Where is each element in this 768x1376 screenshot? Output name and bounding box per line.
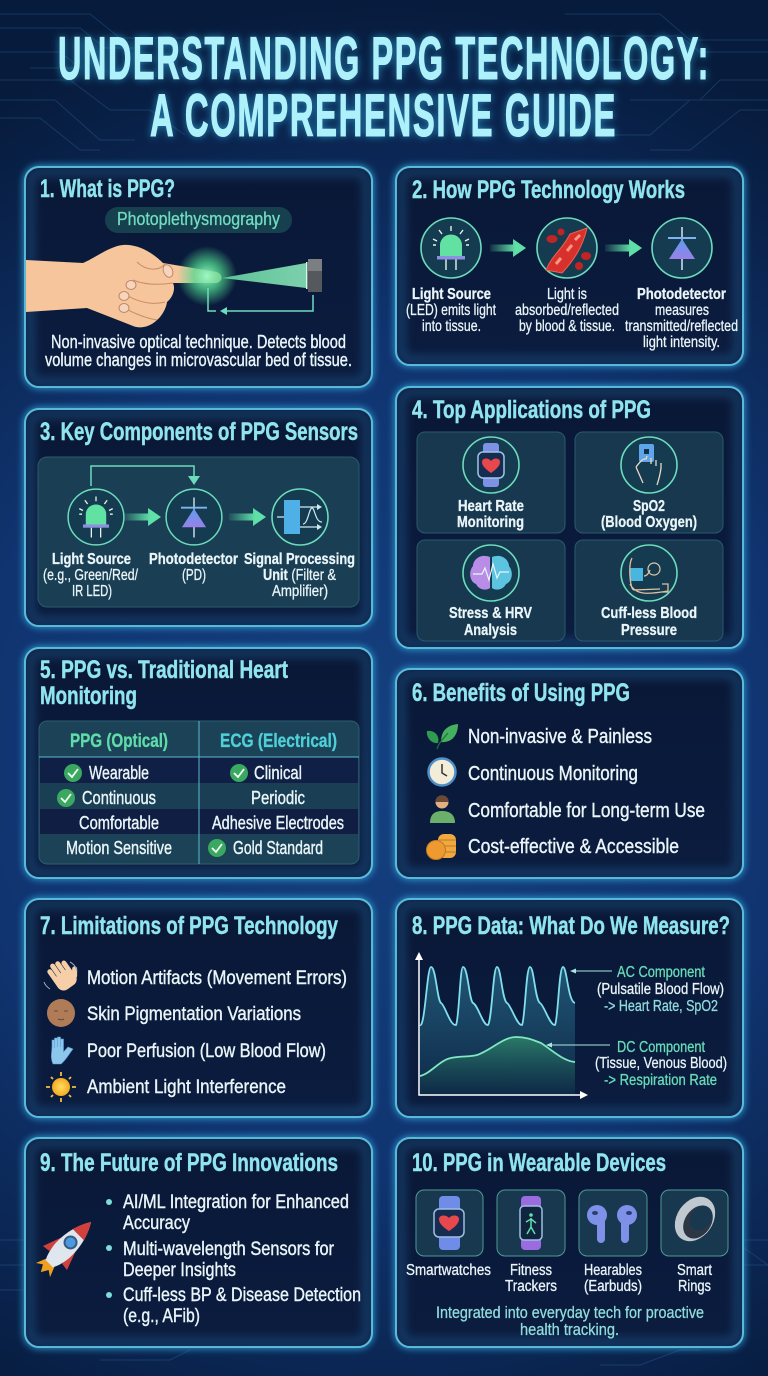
label: signal processing: Amplifier) [272,583,328,600]
bullet list: (e.g., AFib) [123,1306,200,1327]
label: photodetector: Photodetector [149,551,238,568]
description: Non-invasive optical technique. Detects blood [51,332,346,352]
row cells: Continuous [82,788,156,808]
row cells: Wearable [89,763,149,783]
pill: Photoplethysmography [105,207,292,233]
column header PPG: PPG (Optical) [70,731,168,752]
panel: 9 future [25,1138,372,1347]
icon: waving hand [44,953,85,993]
DC label [595,1039,727,1089]
label: light source [43,551,138,600]
limitation text 3: Poor Perfusion (Low Blood Flow) [87,1041,326,1062]
panel: 1 what is PPG [25,167,372,387]
step text: photodetector [625,286,738,351]
step text: photodetector: light intensity. [643,334,720,351]
closing note: health tracking. [520,1320,619,1339]
DC pointer [546,1042,610,1048]
bullet list: Deeper Insights [123,1260,236,1281]
step text: light source: into tissue. [422,318,481,335]
icon: person [430,795,455,823]
heading 5: 5. PPG vs. Traditional Heart [40,656,289,684]
AC label: (Pulsatile Blood Flow) [597,981,724,998]
description [45,332,352,370]
device: earbuds: Hearables [584,1262,642,1279]
icon: photodiode [166,489,222,545]
device: fitness tracker [497,1190,565,1295]
tile: heart rate [417,432,565,533]
panel: 8 PPG data [396,899,743,1117]
device: smartwatch: Smartwatches [406,1262,491,1279]
bullet list: Accuracy [123,1213,190,1234]
icon: coins [426,834,456,860]
comparison table [39,721,359,864]
icon: blood vessel [537,218,597,278]
device: fitness tracker: Fitness [510,1262,552,1279]
heading 3: 3. Key Components of PPG Sensors [40,418,358,446]
label: photodetector [149,551,238,584]
limitation text 2: Skin Pigmentation Variations [87,1004,301,1025]
bullet list [106,1192,361,1327]
DC label: DC Component [617,1039,705,1056]
device: fitness tracker: Trackers [505,1278,557,1295]
tile: stress: Stress & HRV [449,605,532,622]
arrow [124,508,161,526]
heading 6: 6. Benefits of Using PPG [412,679,630,707]
icon: clock [428,758,456,786]
benefit text 2: Continuous Monitoring [468,763,638,785]
panel: 7 limitations [25,899,372,1117]
benefit text 4: Cost-effective & Accessible [468,836,679,858]
step text: light source: Light Source [412,286,491,303]
icon: LED [68,489,124,545]
tile: cuffless BP: Cuff-less Blood [601,605,697,622]
label: light source: IR LED) [72,583,112,600]
step text: light source [406,286,496,335]
icon: LED [421,218,481,278]
AC label: -> Heart Rate, SpO2 [604,998,718,1015]
step text: photodetector: measures [655,302,709,319]
label: signal processing: Signal Processing [244,551,355,568]
pill: Photoplethysmography: Photoplethysmography [117,209,280,229]
illustration: hand on sensor [26,245,322,327]
icon: rocket [29,1210,103,1284]
tile: SpO2: (Blood Oxygen) [601,514,697,531]
step text: photodetector: Photodetector [637,286,726,303]
tile: cuffless BP [575,540,723,641]
heading 4: 4. Top Applications of PPG [412,396,651,424]
panel: 6 benefits [396,669,743,878]
row cells: Gold Standard [233,838,323,858]
label: signal processing: Unit (Filter & [263,567,336,584]
bullet list: Cuff-less BP & Disease Detection [123,1285,361,1306]
icon: leaf [427,724,458,749]
heading 5: Monitoring [40,682,137,710]
row cells: Adhesive Electrodes [212,813,344,833]
icon: sun [46,1072,76,1102]
tile: SpO2 [575,432,723,533]
icon: signal processing [272,489,328,545]
title [58,25,710,149]
panel: 10 wearables [396,1138,743,1347]
tile: heart rate: Heart Rate [458,498,524,515]
heading 9: 9. The Future of PPG Innovations [40,1149,338,1177]
step text: absorption: absorbed/reflected [515,302,619,319]
tile: cuffless BP: Pressure [621,622,677,639]
step text: photodetector: transmitted/reflected [625,318,738,335]
step text: absorption [515,286,619,335]
benefit text 1: Non-invasive & Painless [468,726,652,748]
DC label: (Tissue, Venous Blood) [595,1055,727,1072]
limitation text 4: Ambient Light Interference [87,1077,286,1098]
panel: 3 key components [25,409,372,626]
panel: 2 how it works [396,167,743,365]
label: light source: Light Source [52,551,131,568]
device: earbuds: (Earbuds) [584,1278,642,1295]
bullet list: AI/ML Integration for Enhanced [123,1192,349,1213]
arrow [490,239,526,257]
arrow [229,508,266,526]
connector arrow [91,466,200,486]
icon: photodiode [652,218,712,278]
tile: stress: Analysis [464,622,517,639]
AC label: AC Component [617,964,705,981]
diagram box [38,457,359,607]
device: smartwatch [406,1190,491,1279]
tile: heart rate: Monitoring [457,514,524,531]
column header ECG: ECG (Electrical) [220,731,337,752]
row cells: Periodic [251,788,305,808]
check marks [57,764,248,857]
row cells: Comfortable [79,813,159,833]
label: light source: (e.g., Green/Red/ [43,567,138,584]
step text: light source: (LED) emits light [406,302,496,319]
label: photodetector: (PD) [182,567,206,584]
AC label [597,964,724,1015]
device: earbuds [579,1190,647,1295]
closing note [436,1303,704,1339]
arrow [605,239,642,257]
tile: stress [417,540,565,641]
icon: blue hand [51,1037,73,1064]
heading 10: 10. PPG in Wearable Devices [412,1149,666,1177]
closing note: Integrated into everyday tech for proactive [436,1303,704,1322]
step text: absorption: by blood & tissue. [519,318,615,335]
AC pointer [570,968,612,974]
icon: face [47,999,75,1027]
device: smart ring: Rings [678,1278,711,1295]
bullet list: Multi-wavelength Sensors for [123,1239,335,1260]
benefit text 3: Comfortable for Long-term Use [468,800,705,822]
limitation text 1: Motion Artifacts (Movement Errors) [87,968,347,989]
heading 5 [40,656,289,710]
row cells: Motion Sensitive [66,838,172,858]
tile: SpO2: SpO2 [633,498,665,515]
row cells: Clinical [254,763,302,783]
step text: absorption: Light is [547,286,587,303]
device: smart ring [661,1189,728,1295]
heading 7: 7. Limitations of PPG Technology [40,912,338,940]
heading 1: 1. What is PPG? [40,175,175,203]
device: smart ring: Smart [677,1262,712,1279]
panel: 5 PPG vs traditional [25,648,372,878]
row cells [66,763,344,858]
waveform chart [415,952,588,1099]
description: volume changes in microvascular bed of tissue. [45,350,352,370]
label: signal processing [244,551,355,600]
panel: 4 applications [396,387,743,648]
DC label: -> Respiration Rate [604,1072,717,1089]
